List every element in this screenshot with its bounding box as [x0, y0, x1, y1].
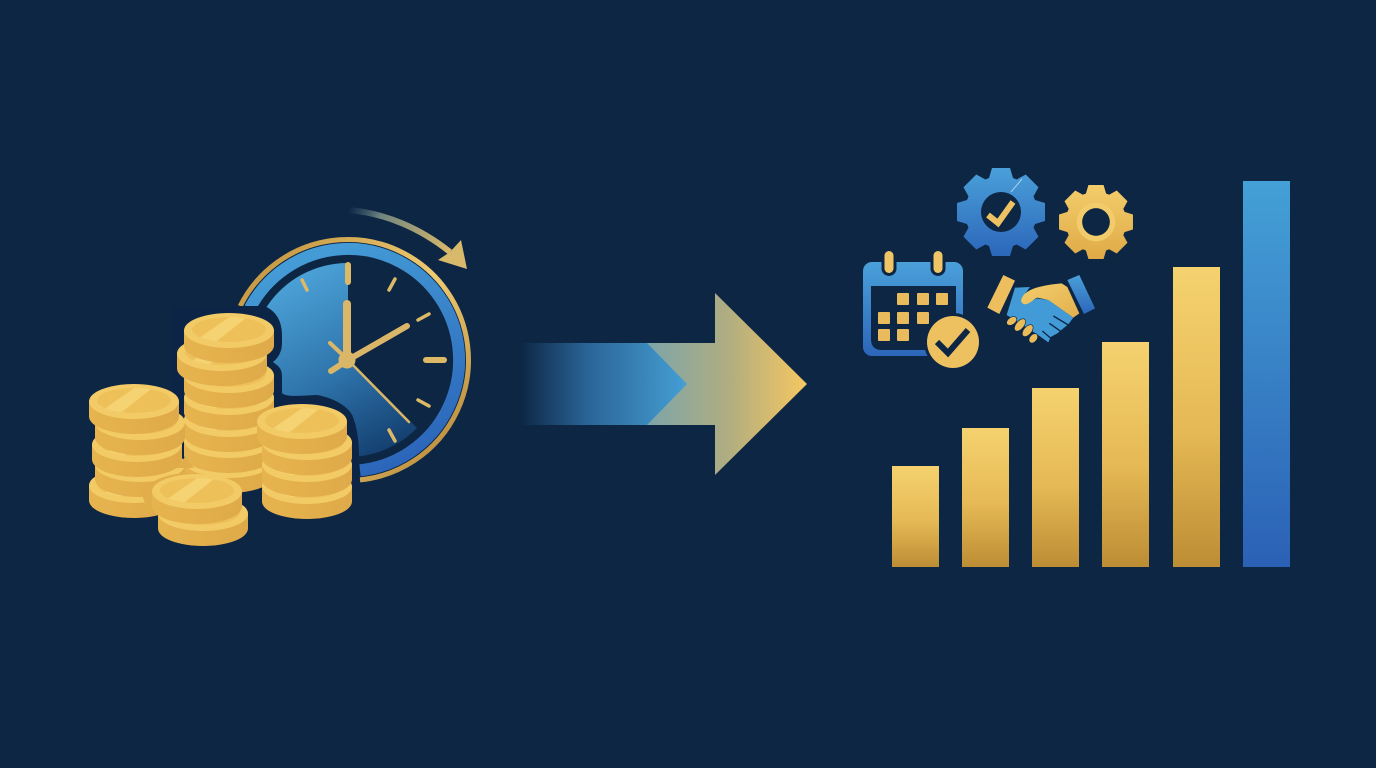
calendar binder rings [882, 248, 946, 276]
calendar inner page [871, 286, 956, 350]
calendar date squares [878, 293, 948, 341]
gold halo behind front coins [143, 457, 237, 519]
clock elapsed time wedge [251, 263, 417, 457]
bar 1 [892, 466, 939, 567]
clock hour ticks [302, 265, 444, 441]
icon: clock with elapsed time [240, 210, 468, 480]
icon: handshake [987, 275, 1095, 345]
icon: blue gear with check [957, 168, 1045, 256]
finger divider lines [1042, 316, 1068, 339]
clock hands [330, 304, 409, 422]
gold fingers [1005, 315, 1040, 345]
clock outer gold ring [240, 240, 468, 480]
icon: gold gear [1059, 185, 1133, 259]
infographic canvas [89, 168, 1290, 567]
bar 3 [1032, 388, 1079, 567]
blue hand [1007, 287, 1073, 342]
dark gap behind coins [172, 306, 360, 490]
clock sweep arrow [348, 210, 467, 269]
clock blue ring [250, 249, 459, 470]
coin stacks [89, 306, 360, 546]
left gold cuff [987, 275, 1015, 314]
arrow blue chevron tail [520, 343, 687, 425]
coin stack: tall centre [177, 313, 274, 493]
bar 2 [962, 428, 1009, 567]
arrow gold body [640, 293, 807, 475]
bar chart: rising growth [892, 181, 1290, 567]
bar 6 [1243, 181, 1290, 567]
bar 4 [1102, 342, 1149, 567]
coin stack: left [89, 384, 185, 518]
calendar body [863, 262, 963, 356]
arrow: transformation from investment to growth [520, 293, 807, 475]
coin stack: right [257, 404, 352, 519]
calendar check badge [924, 313, 982, 371]
coin stack: front [152, 474, 248, 546]
gold hand [1021, 283, 1079, 318]
right blue cuff [1067, 275, 1095, 314]
bar 5 [1173, 267, 1220, 567]
icon: calendar with check [863, 248, 982, 371]
